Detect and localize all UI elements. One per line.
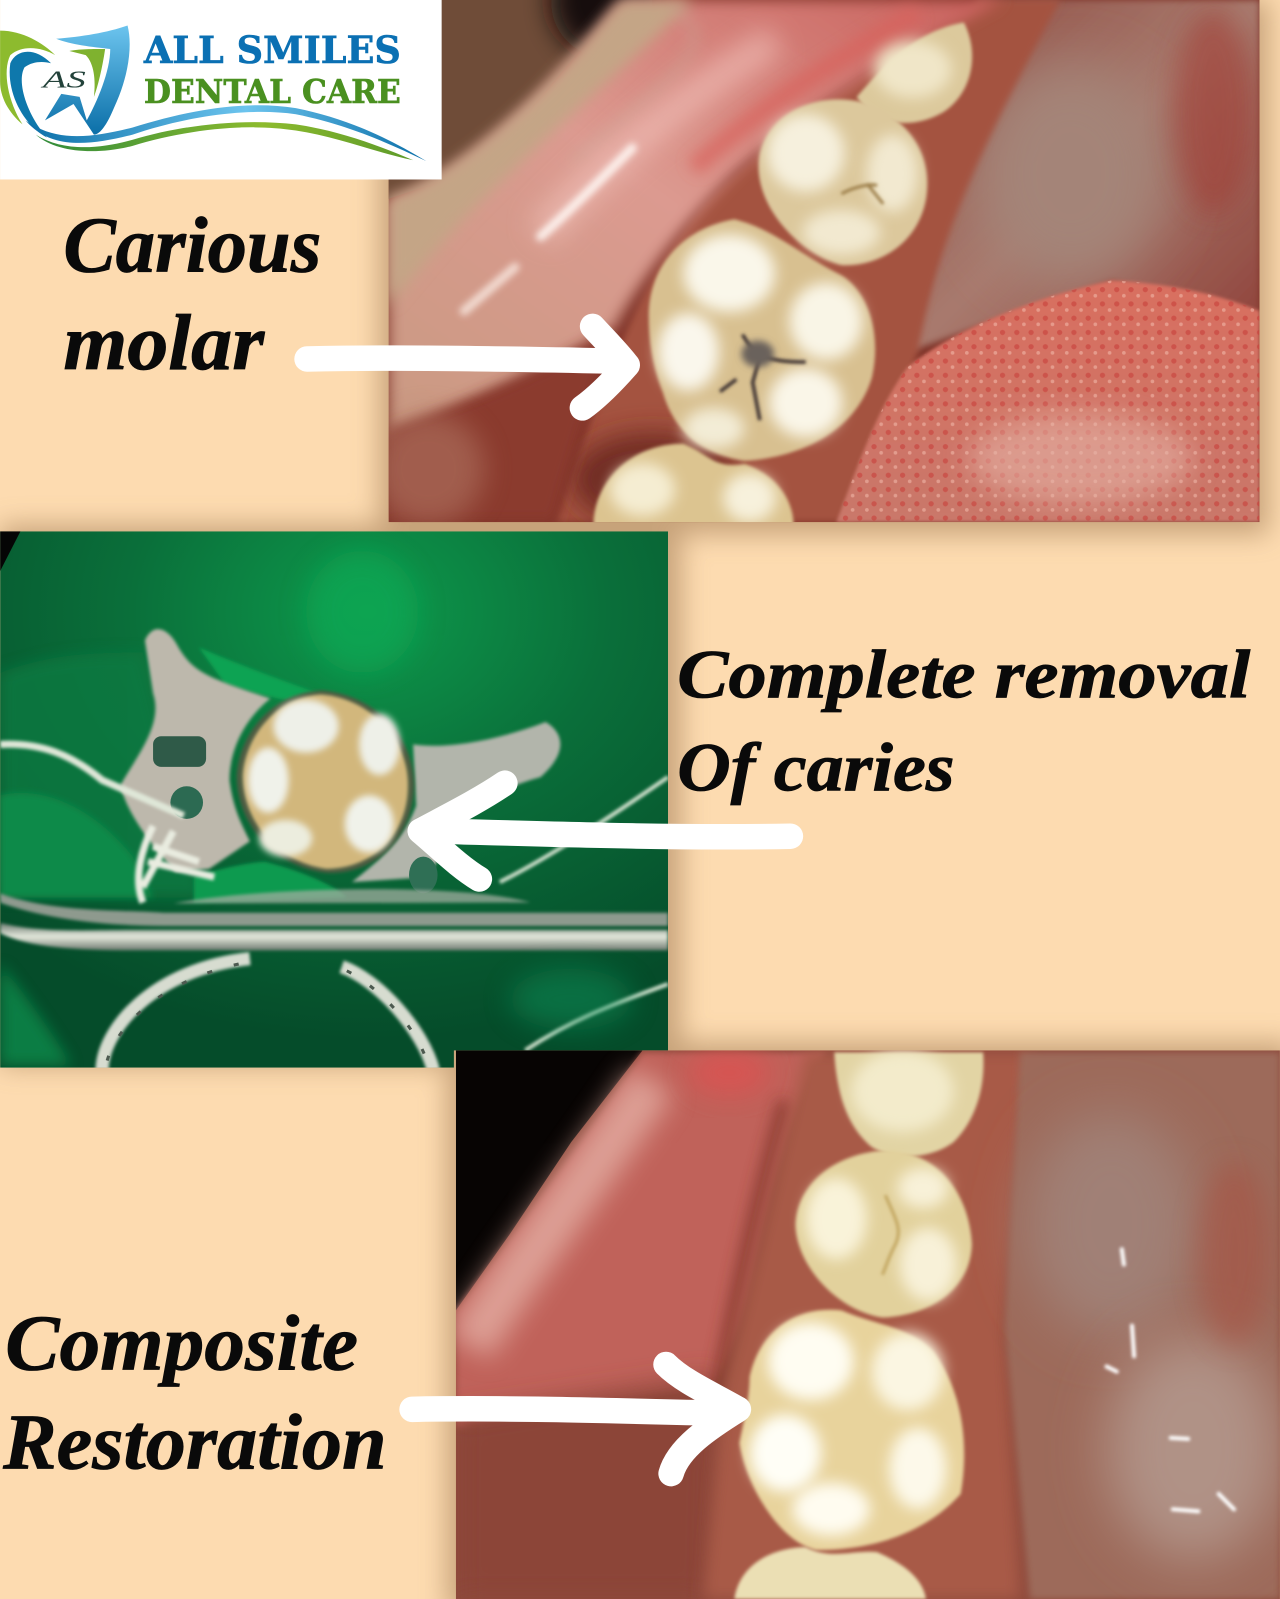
mucosa right bbox=[908, 0, 1260, 352]
arrow: to composite restoration bbox=[412, 1364, 738, 1474]
lip bbox=[456, 1052, 826, 1428]
heading: complete removal of caries: Of caries bbox=[677, 728, 955, 805]
heading: carious molar bbox=[63, 201, 321, 387]
arrow: to carious molar bbox=[307, 326, 627, 408]
carious molar bbox=[649, 219, 875, 461]
highlights bbox=[1107, 1249, 1234, 1511]
rubber dam clamp bbox=[120, 629, 560, 893]
panel: carious molar photo bbox=[372, 0, 1260, 530]
icon: tooth logo bbox=[0, 25, 130, 138]
forceps bars bbox=[0, 893, 668, 926]
floss ring bbox=[102, 959, 433, 1071]
background brown area bbox=[388, 0, 576, 199]
bottom tooth bbox=[594, 444, 794, 530]
tooth bbox=[237, 690, 414, 873]
heading: complete removal of caries: Complete removal bbox=[677, 636, 1251, 713]
tongue bbox=[836, 280, 1260, 522]
heading: complete removal of caries bbox=[677, 636, 1251, 805]
heading: composite restoration: Composite bbox=[5, 1300, 358, 1388]
lower cheek bbox=[389, 331, 612, 522]
logo swooshes bbox=[26, 105, 426, 161]
black corner bbox=[456, 1050, 643, 1310]
logo wordmark: all smiles: ALL SMILES bbox=[143, 28, 401, 72]
panel: composite restoration photo bbox=[456, 1050, 1280, 1599]
bottom tooth bbox=[734, 1547, 926, 1599]
panel: isolated tooth with caries removed photo bbox=[0, 531, 668, 1071]
heading: carious molar: Carious bbox=[63, 201, 321, 289]
arrow: to prepared tooth bbox=[420, 783, 790, 879]
top premolar bbox=[834, 1052, 984, 1156]
small top tooth bbox=[857, 22, 972, 123]
logo panel bbox=[0, 0, 442, 179]
heading: composite restoration bbox=[2, 1300, 387, 1486]
floss bbox=[0, 744, 184, 816]
gingiva bbox=[556, 0, 1061, 522]
logo wordmark: dental care: DENTAL CARE bbox=[144, 72, 401, 111]
upper molar bbox=[759, 99, 927, 265]
gingiva bbox=[704, 1052, 1030, 1599]
restored molar bbox=[739, 1310, 964, 1550]
second premolar bbox=[796, 1150, 972, 1318]
lip bbox=[389, 0, 1005, 439]
heading: carious molar: molar bbox=[63, 299, 265, 387]
caries stain bbox=[720, 334, 806, 420]
heading: composite restoration: Restoration bbox=[2, 1398, 387, 1486]
mucosa right bbox=[1005, 1052, 1280, 1599]
icon: tooth logo: AS bbox=[40, 67, 86, 94]
